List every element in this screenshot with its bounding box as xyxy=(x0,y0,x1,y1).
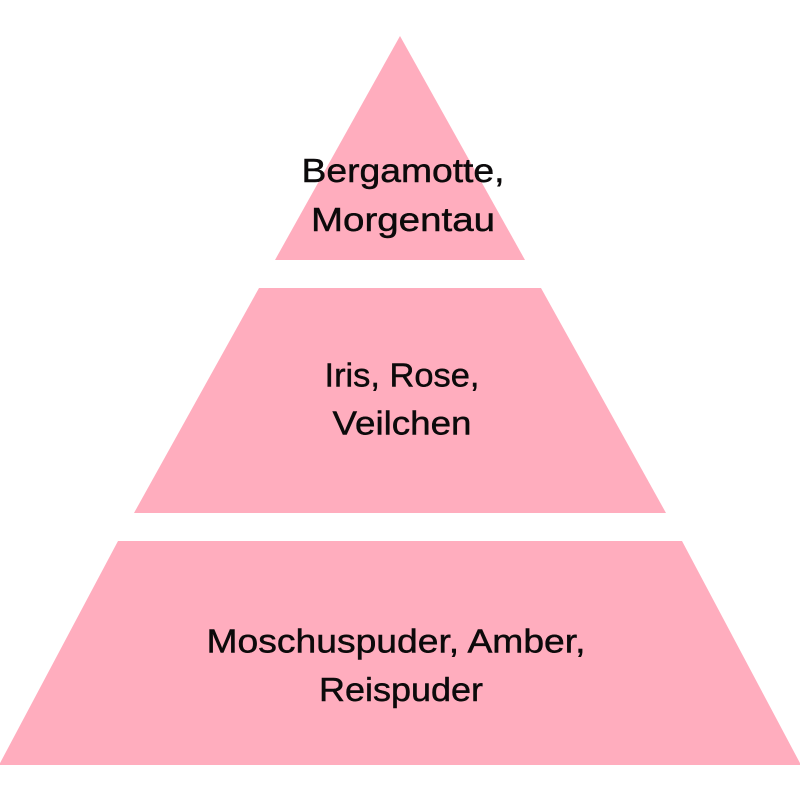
text: middle tier label: Veilchen xyxy=(332,404,472,442)
panel: middle tier xyxy=(134,288,666,513)
panel: top tier xyxy=(275,36,525,260)
text: middle tier label: Iris, Rose, xyxy=(324,356,480,394)
text: middle tier label xyxy=(324,356,480,442)
text: bottom tier label xyxy=(206,622,586,708)
text: top tier label: Bergamotte, xyxy=(302,152,504,189)
text: top tier label: Morgentau xyxy=(311,201,495,238)
text: bottom tier label: Reispuder xyxy=(319,671,483,708)
text: bottom tier label: Moschuspuder, Amber, xyxy=(206,622,586,660)
text: top tier label xyxy=(302,152,504,238)
panel: bottom tier xyxy=(0,541,800,765)
